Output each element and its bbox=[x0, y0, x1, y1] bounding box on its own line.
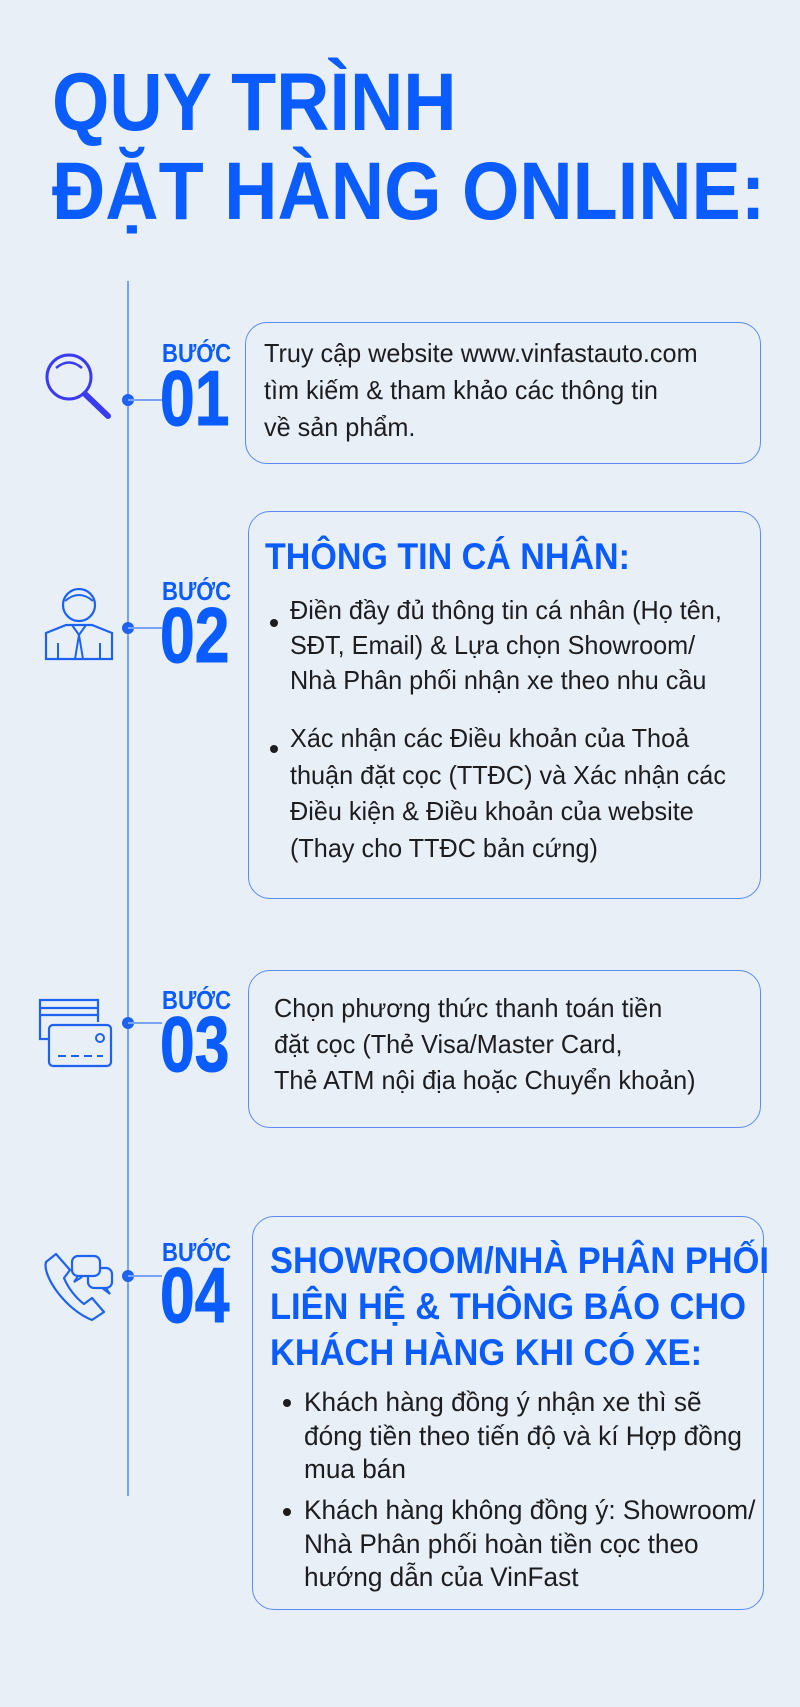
box 4 bbox=[252, 1216, 764, 1610]
step 4: Nhà Phân phối hoàn tiền cọc theo bbox=[304, 1528, 699, 1558]
step 1: về sản phẩm. bbox=[264, 412, 415, 442]
step label 02: BƯỚC bbox=[162, 576, 231, 606]
box 3 text bbox=[248, 970, 761, 1128]
step 2: Nhà Phân phối nhận xe theo nhu cầu bbox=[290, 665, 706, 695]
step 1: Truy cập website www.vinfastauto.com bbox=[264, 338, 698, 368]
title: QUY TRÌNH bbox=[52, 57, 457, 148]
heading 4: LIÊN HỆ & THÔNG BÁO CHO bbox=[270, 1286, 746, 1327]
step label 04: BƯỚC bbox=[162, 1237, 231, 1267]
timeline dot bbox=[122, 394, 134, 406]
icon: phone chat bbox=[44, 1252, 114, 1322]
timeline line bbox=[127, 281, 129, 1496]
step 4: Khách hàng không đồng ý: Showroom/ bbox=[304, 1495, 755, 1525]
box 2 bbox=[248, 511, 761, 899]
step 4: mua bán bbox=[304, 1454, 406, 1484]
icon: person bbox=[44, 588, 114, 660]
step 3: đặt cọc (Thẻ Visa/Master Card, bbox=[274, 1029, 623, 1059]
title bbox=[52, 57, 765, 237]
step 2: Xác nhận các Điều khoản của Thoả bbox=[290, 723, 689, 753]
step 2: SĐT, Email) & Lựa chọn Showroom/ bbox=[290, 630, 695, 660]
step 3: 03 bbox=[160, 1000, 229, 1088]
step 2: Điền đầy đủ thông tin cá nhân (Họ tên, bbox=[290, 595, 722, 625]
step 4 bbox=[44, 1216, 769, 1610]
step 4: Khách hàng đồng ý nhận xe thì sẽ bbox=[304, 1387, 702, 1417]
timeline dot bbox=[122, 1017, 134, 1029]
timeline dot bbox=[122, 622, 134, 634]
step 1 bbox=[46, 322, 761, 464]
bullets 2 bbox=[270, 619, 278, 627]
step 2: Điều kiện & Điều khoản của website bbox=[290, 796, 694, 826]
heading 4 bbox=[270, 1240, 769, 1373]
heading 4: KHÁCH HÀNG KHI CÓ XE: bbox=[270, 1332, 702, 1373]
step 4: hướng dẫn của VinFast bbox=[304, 1562, 578, 1592]
step 4: đóng tiền theo tiến độ và kí Hợp đồng bbox=[304, 1420, 742, 1450]
box 1 text bbox=[245, 322, 761, 464]
step 3: Chọn phương thức thanh toán tiền bbox=[274, 993, 662, 1023]
heading 2: THÔNG TIN CÁ NHÂN: bbox=[265, 536, 630, 577]
step 1: 01 bbox=[160, 354, 229, 442]
timeline dot bbox=[122, 1270, 134, 1282]
step 2: thuận đặt cọc (TTĐC) và Xác nhận các bbox=[290, 760, 726, 790]
step 1: tìm kiếm & tham khảo các thông tin bbox=[264, 375, 658, 405]
step 3 bbox=[38, 970, 761, 1128]
step 2: 02 bbox=[160, 591, 229, 679]
step label 01: BƯỚC bbox=[162, 338, 231, 368]
icon: magnifier bbox=[46, 354, 111, 419]
step 2 bbox=[44, 511, 761, 899]
icon: cards bbox=[38, 998, 112, 1068]
step 4: 04 bbox=[160, 1251, 229, 1339]
bullets 4 bbox=[283, 1399, 291, 1407]
title: ĐẶT HÀNG ONLINE: bbox=[52, 146, 765, 237]
step 2: (Thay cho TTĐC bản cứng) bbox=[290, 832, 598, 862]
step 3: Thẻ ATM nội địa hoặc Chuyển khoản) bbox=[274, 1065, 696, 1095]
heading 4: SHOWROOM/NHÀ PHÂN PHỐI bbox=[270, 1240, 769, 1281]
step label 03: BƯỚC bbox=[162, 985, 231, 1015]
